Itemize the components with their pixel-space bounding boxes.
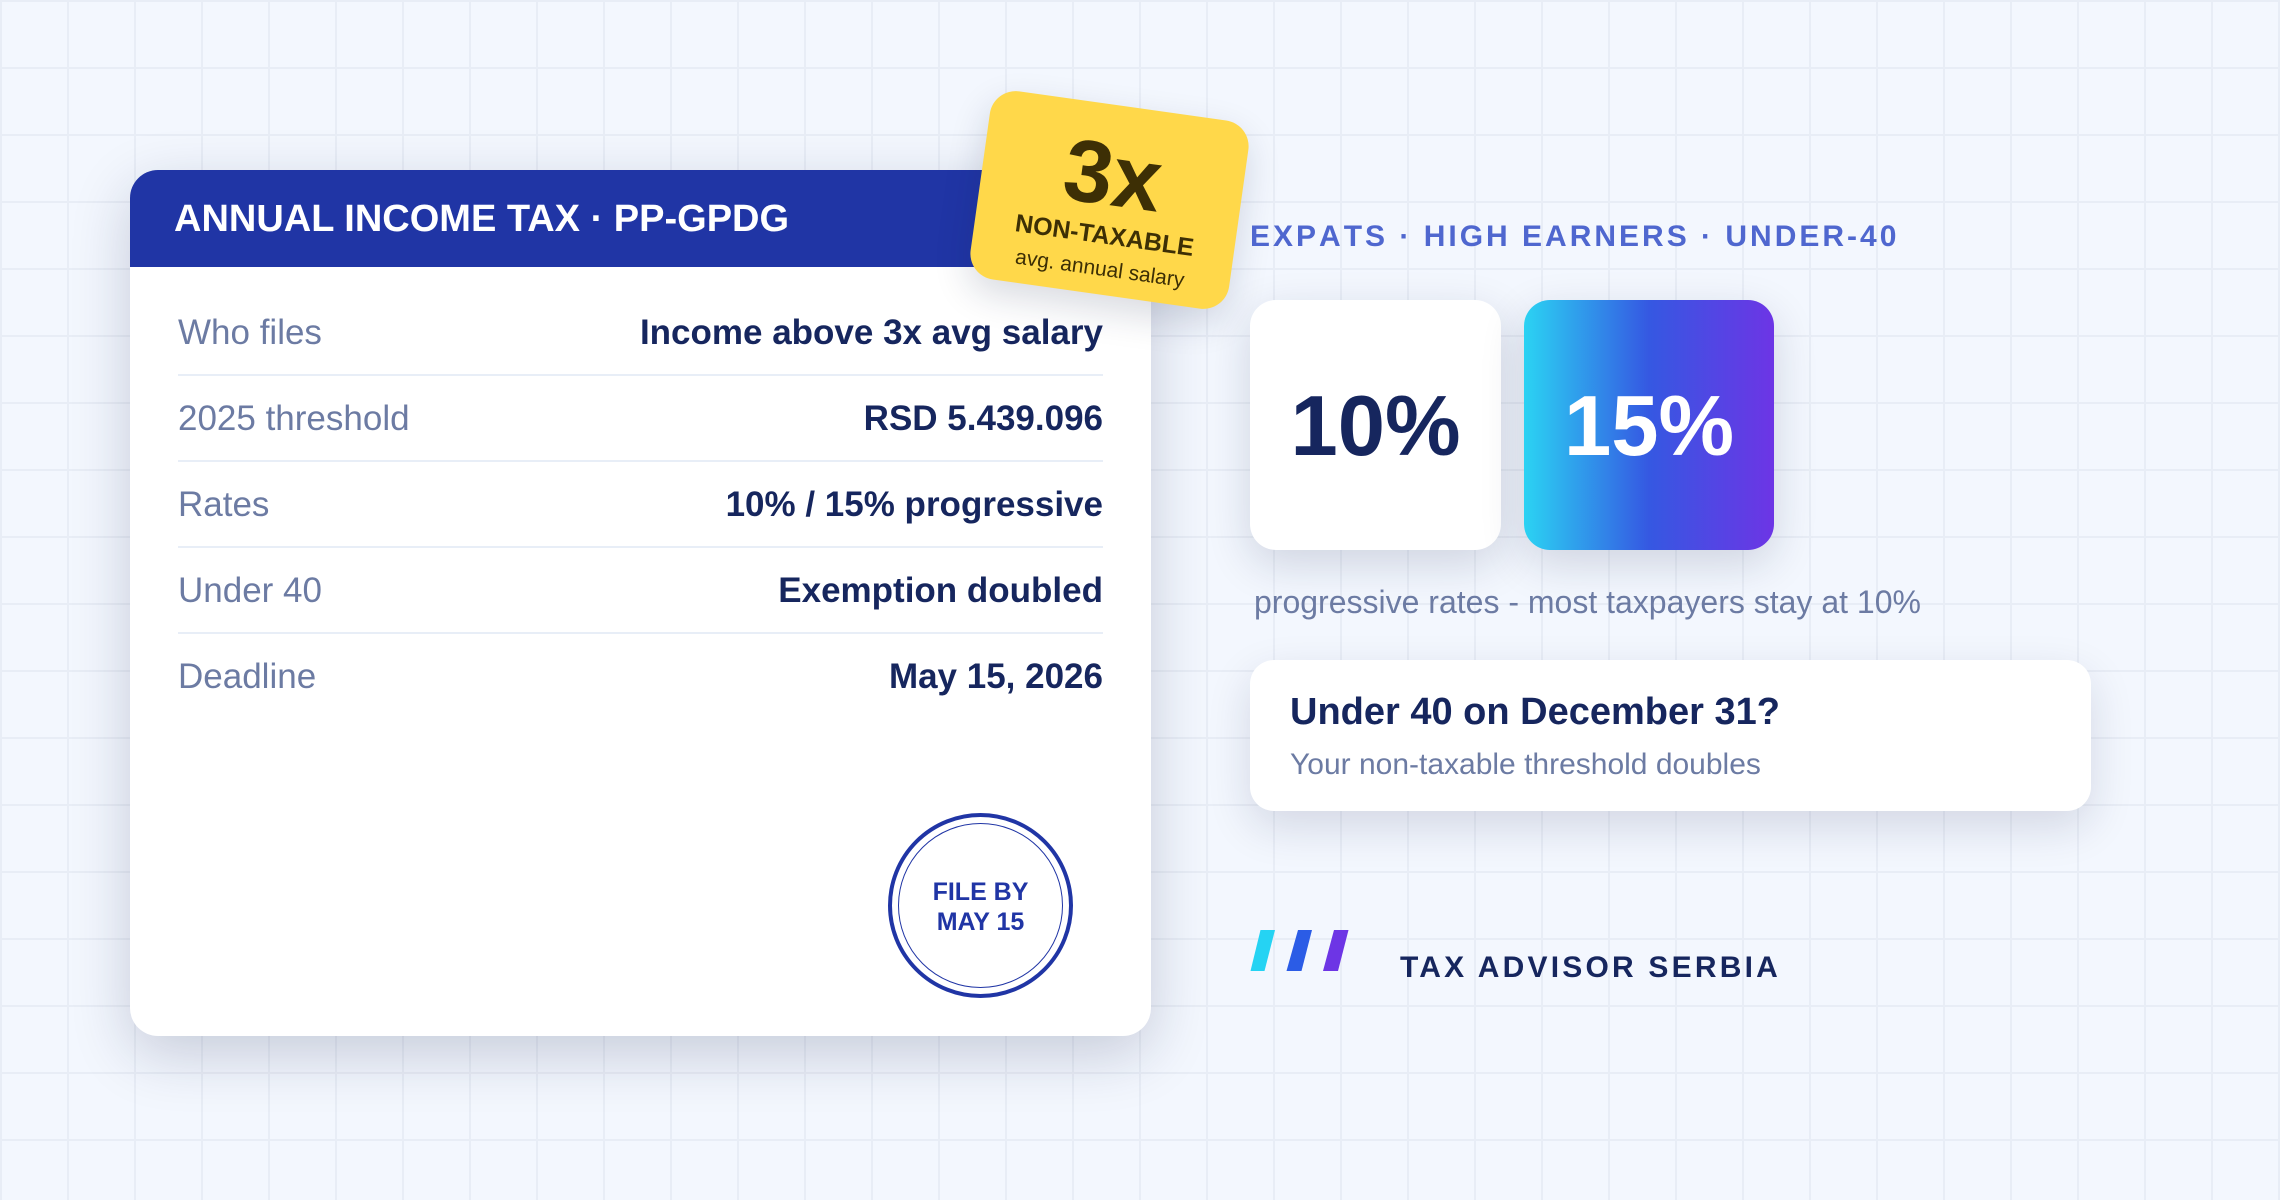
row: who files: Income above 3x avg salary	[640, 313, 1103, 352]
stamp: file by May 15	[888, 813, 1073, 998]
card header	[130, 170, 1151, 267]
row: 2025 threshold: RSD 5.439.096	[864, 399, 1103, 438]
callout: under 40	[1250, 660, 2091, 811]
row: under 40: Exemption doubled	[778, 571, 1103, 610]
row: deadline	[178, 657, 1103, 696]
row: who files: Who files	[178, 313, 322, 352]
stamp inner ring and text	[898, 823, 1063, 988]
icon: logo bars	[1250, 930, 1348, 971]
badge: 3x non-taxable	[967, 88, 1252, 312]
row: 2025 threshold: 2025 threshold	[178, 399, 410, 438]
eyebrow heading: EXPATS · HIGH EARNERS · UNDER-40	[1250, 220, 1899, 253]
brand name: TAX ADVISOR SERBIA	[1400, 951, 1781, 984]
row: deadline: May 15, 2026	[889, 657, 1103, 696]
row: rates	[178, 485, 1103, 524]
rate tile: 15%: 15%	[1564, 379, 1734, 474]
panel: tax form card	[130, 170, 1151, 1036]
rates caption: progressive rates - most taxpayers stay at 10%	[1254, 584, 1921, 620]
card header: ANNUAL INCOME TAX · PP-GPDG	[174, 198, 789, 240]
row: rates: 10% / 15% progressive	[726, 485, 1103, 524]
badge label: NON-TAXABLE	[1013, 209, 1196, 262]
row: 2025 threshold	[178, 399, 1103, 438]
rate tile: 10%	[1250, 300, 1501, 550]
stamp inner ring and text: MAY 15	[937, 908, 1024, 936]
row: deadline: Deadline	[178, 657, 316, 696]
row: under 40: Under 40	[178, 571, 322, 610]
badge caption: avg. annual salary	[1014, 246, 1186, 292]
callout text: Your non-taxable threshold doubles	[1290, 748, 1761, 781]
row: who files	[178, 313, 1103, 352]
row: under 40	[178, 571, 1103, 610]
row: rates: Rates	[178, 485, 269, 524]
stamp inner ring and text: FILE BY	[933, 878, 1028, 906]
rate tile: 15%	[1524, 300, 1774, 550]
badge number: 3x	[1058, 119, 1168, 231]
rate tile: 10%: 10%	[1290, 379, 1461, 474]
callout title: Under 40 on December 31?	[1290, 691, 1780, 733]
